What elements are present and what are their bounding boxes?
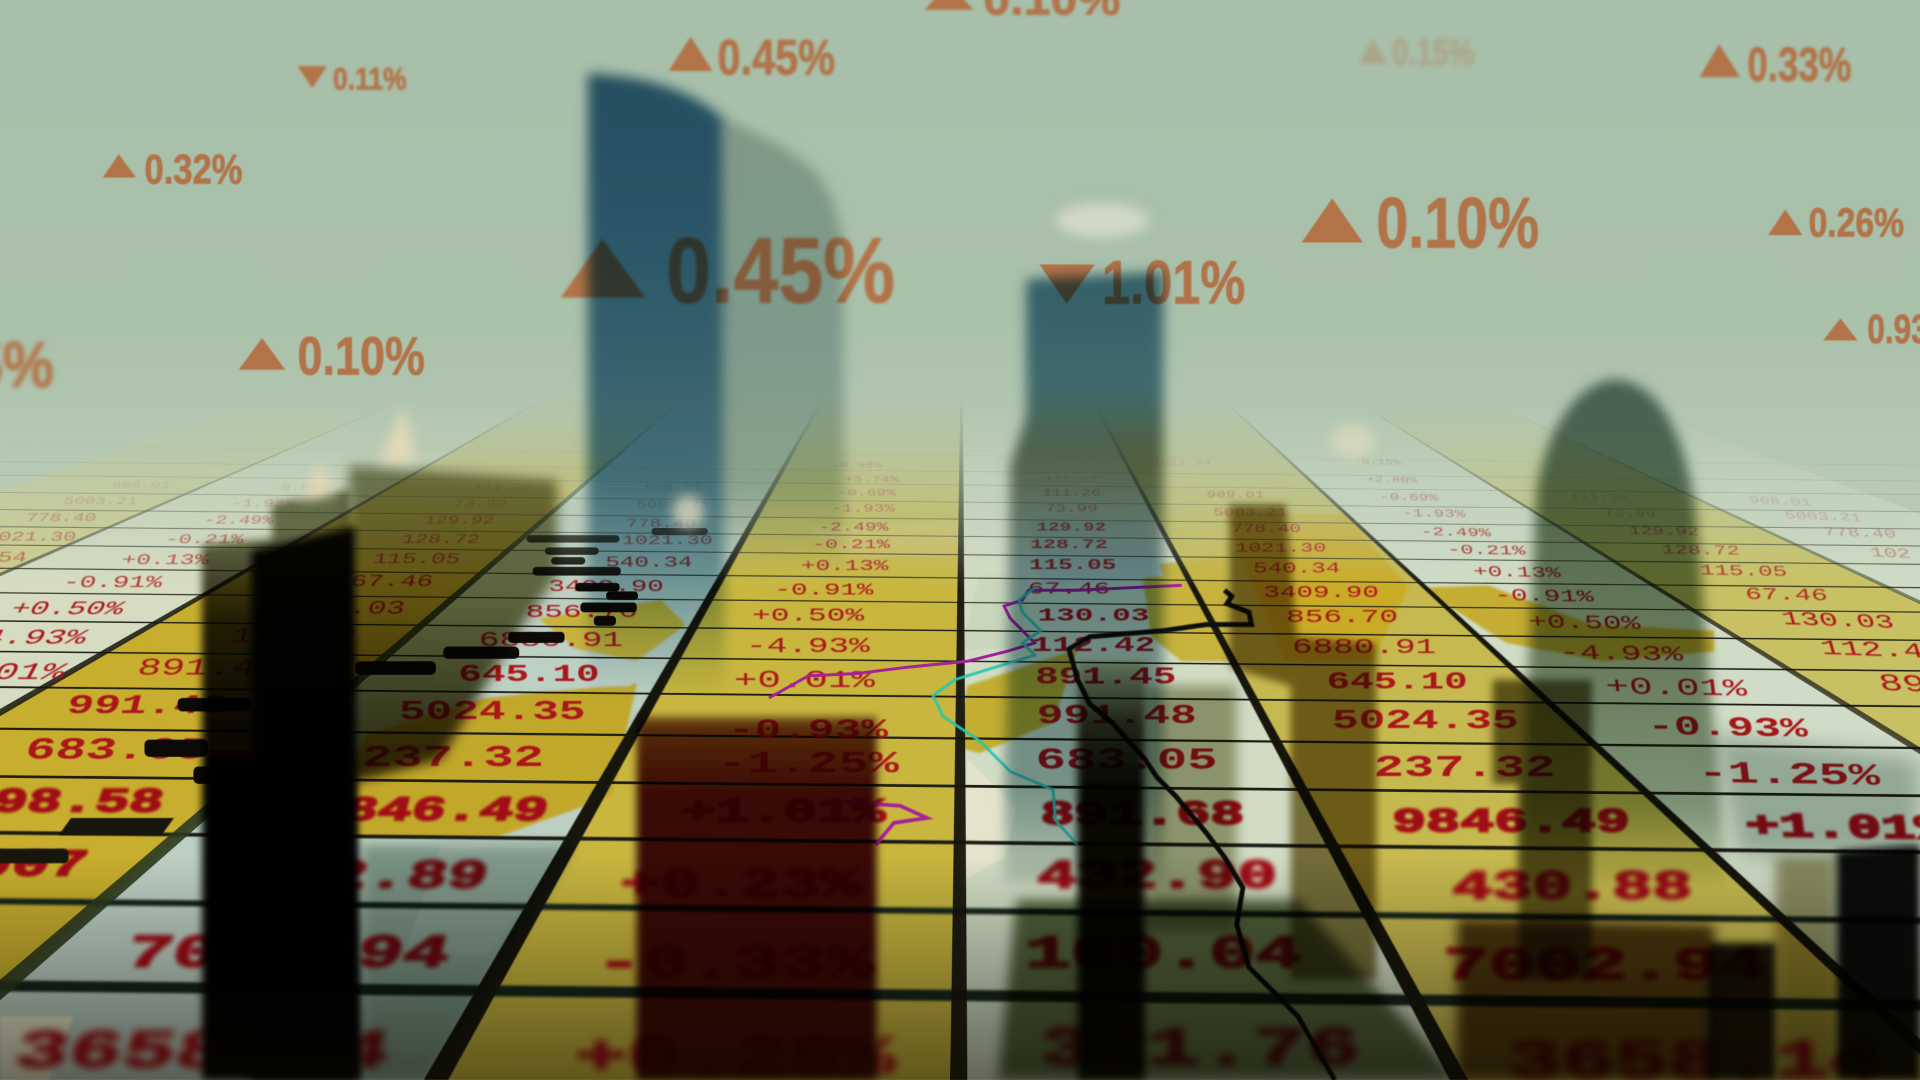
table values: far rows: 111.26 <box>1042 488 1101 499</box>
building: small olive column right <box>1776 857 1837 1080</box>
table values: far rows: -1.93% <box>230 499 297 510</box>
table values: middle rows: 991.48 <box>1037 701 1197 732</box>
table values: middle rows: 3409.90 <box>1264 583 1379 602</box>
table column lines <box>0 411 1920 1080</box>
table values: near blurred rows: 891.68 <box>1041 796 1244 835</box>
building: right far haze <box>1714 735 1920 857</box>
highlight: left block spire <box>380 404 416 463</box>
building: center near dark column <box>1078 661 1145 1080</box>
table values: far rows: +2.80% <box>1366 474 1419 486</box>
table values: nearest rows: 432.90 <box>1037 854 1277 900</box>
building: right mid band <box>1493 680 1592 980</box>
table columns <box>0 367 1920 1080</box>
building: left back tower <box>202 490 361 1080</box>
table values: middle rows: -2.49% <box>819 521 889 534</box>
table values: near blurred rows <box>0 784 1920 887</box>
table values: nearest rows: +0.23% <box>621 862 862 908</box>
bottom vignette <box>0 857 1920 1080</box>
table values: middle rows: +0.50% <box>5 599 130 620</box>
table values: middle rows: 856.70 <box>1286 607 1398 628</box>
table values: middle rows: -0.21% <box>812 538 890 552</box>
table values: middle rows: 6880.91 <box>479 628 623 653</box>
building: tall curved tower dark face <box>588 73 725 698</box>
table values: far rows: 909.01 <box>1206 490 1265 501</box>
ticker: 0.33%: 0.33% <box>1747 39 1851 92</box>
building: left black column <box>251 527 358 1080</box>
ticker: 0.45% large: 0.45% <box>666 218 895 322</box>
table values: middle rows: 891.45 <box>134 655 282 682</box>
ticker: 0.26% <box>1768 199 1904 245</box>
table values: middle rows: 891.45 <box>1035 664 1176 691</box>
table values: middle rows: 1021.30 <box>1235 541 1326 556</box>
table values: middle rows: +0.01% <box>1604 673 1749 703</box>
ticker: faint 0.15% <box>1359 32 1474 73</box>
table values: far rows: +5.74% <box>844 475 900 485</box>
table values: far rows: 908.01 <box>644 483 703 494</box>
table values: far rows: 908.01 <box>1748 495 1813 509</box>
table values: middle rows: 778.40 <box>626 517 696 531</box>
table values: middle rows: 645.10 <box>458 661 600 688</box>
table values: middle rows: 778.40 <box>1231 522 1301 536</box>
ticker: clipped top <box>924 0 1120 25</box>
table values: middle rows: +0.50% <box>1527 612 1642 635</box>
ticker: clipped right <box>1823 306 1920 352</box>
table values: middle rows: 129.92 <box>1628 524 1700 539</box>
building: near dark red tower <box>637 716 877 1080</box>
table values: middle rows: 112.42 <box>229 625 359 649</box>
table values: middle rows: -1.25% <box>717 746 900 782</box>
map continents <box>0 514 1714 1080</box>
table values: middle rows: -2.49% <box>202 514 276 527</box>
building: tall curved tower light face <box>722 118 845 576</box>
table values: middle rows: -0.93% <box>1646 712 1810 745</box>
candlestick bars near and blurred <box>0 818 174 863</box>
table values: middle rows: 67.46 <box>348 572 435 591</box>
table values: middle rows: -4.93% <box>1558 641 1685 667</box>
table values: middle rows: 129.92 <box>423 514 496 527</box>
table values: nearest rows: 7002.94 <box>120 929 456 981</box>
table values: middle rows: 5024.35 <box>1332 706 1519 737</box>
ticker: 0.10% large right: 0.10% <box>1376 184 1539 263</box>
table values: middle rows: 683.05 <box>21 733 212 768</box>
ticker: 1.01% down <box>1040 249 1245 317</box>
table values: far rows: 73.99 <box>1603 508 1657 521</box>
table values: middle rows: +0.13% <box>119 552 212 569</box>
table values: middle rows: 67.46 <box>1028 579 1110 599</box>
table values: far rows: 5003.21 <box>637 500 711 512</box>
table values: middle rows: +0.13% <box>1472 564 1563 582</box>
table values: middle rows: -4.93% <box>746 634 871 659</box>
table values: nearest rows: 430.88 <box>1452 865 1692 911</box>
table values: middle rows: 645.10 <box>1327 668 1468 696</box>
ticker: 0.32% up: 0.32% <box>144 146 242 193</box>
building: center grey band <box>1145 686 1237 931</box>
table values: far rows: -0.69% <box>838 488 897 499</box>
ticker: 0.33% <box>1700 39 1851 92</box>
table values: near blurred rows: 9846.49 <box>1392 803 1630 842</box>
table values: nearest rows: 100.04 <box>1025 929 1301 981</box>
table values: middle rows: -1.25% <box>1696 756 1883 794</box>
table values: middle rows: 237.32 <box>1374 750 1555 785</box>
highlight: center tower cap <box>1056 203 1149 238</box>
table values: far rows: 73.99 <box>1045 504 1098 515</box>
table values: middle rows: 778.40 <box>25 511 98 525</box>
table values: middle rows: 115.05 <box>1029 557 1116 574</box>
table values: middle rows: 991.48 <box>63 691 231 722</box>
table values: middle rows: 128.72 <box>1030 538 1108 552</box>
table values: middle rows: 540.34 <box>605 555 693 572</box>
table values: middle rows: +0.01% <box>734 667 876 694</box>
table values: nearest rows: 432.89 <box>242 854 493 900</box>
table values: far rows: 5003.21 <box>1783 509 1863 525</box>
table rows <box>0 446 1920 1005</box>
percentage tickers <box>0 0 1920 401</box>
highlight: left low spire <box>300 463 337 502</box>
line chart: black series <box>1069 590 1335 1080</box>
perspective data table floor: 321.76 <box>1040 1020 1360 1080</box>
table values: middle rows: 6880.91 <box>1292 636 1436 660</box>
ticker: 0.45% top <box>669 30 835 86</box>
building: left lower haze <box>361 845 576 1080</box>
table values: middle rows: 540.34 <box>1253 561 1340 578</box>
table values: middle rows: 778.40 <box>1822 526 1898 542</box>
table values: middle rows: +0.50% <box>752 605 865 627</box>
table values: far rows: 73.99 <box>452 499 508 510</box>
building: lower right black column <box>1707 943 1776 1080</box>
highlight: right spire <box>1331 424 1375 458</box>
table values: middle rows: 115.05 <box>1699 563 1788 581</box>
line chart: cyan series <box>933 588 1078 845</box>
perspective data table floor <box>0 411 1920 1080</box>
building: far right black corner <box>1837 845 1920 1080</box>
table values: middle rows: -2.49% <box>1420 525 1492 540</box>
table values: nearest rows: 7002.94 <box>1443 941 1765 994</box>
ticker: 0.10% left <box>239 327 425 387</box>
candlestick bars <box>144 528 708 784</box>
line chart: magenta near series <box>845 802 927 845</box>
ticker: 0.10% large right <box>1302 184 1539 263</box>
table values: far rows: -0.69% <box>269 483 331 494</box>
table values: middle rows: 130.03 <box>290 598 408 619</box>
line chart: magenta series <box>769 585 1182 698</box>
table values: far rows: 5003.21 <box>62 496 139 508</box>
highlight: mid spire <box>672 495 704 529</box>
table values: near blurred rows: +1.01% <box>682 794 886 832</box>
table values: middle rows: -0.93% <box>728 716 889 746</box>
table values: middle rows: 683.05 <box>1036 743 1217 778</box>
ticker: 0.11% down: 0.11% <box>333 60 407 96</box>
building: left block <box>349 465 557 784</box>
table values: middle rows: -0.21% <box>164 533 245 547</box>
table values: middle rows: 130.03 <box>1779 608 1897 634</box>
table values: middle rows: 128.72 <box>1661 543 1741 559</box>
building: center tower <box>1004 272 1163 882</box>
table values: middle rows: 128.72 <box>400 533 482 547</box>
table values: middle rows: 129.92 <box>1037 521 1106 534</box>
table values: nearest rows: -0.33% <box>596 939 874 991</box>
building: lower right row <box>1457 918 1714 1080</box>
ticker: 0.26%: 0.26% <box>1809 199 1904 245</box>
building: right rounded tower <box>1518 380 1727 882</box>
table values: middle rows: 237.32 <box>362 740 544 776</box>
table values: middle rows: 67.46 <box>1744 585 1829 605</box>
table values: far rows: 908.01 <box>110 481 171 492</box>
ticker: 1.01% down: 1.01% <box>1102 249 1245 317</box>
table values: far rows: 111.26 <box>1569 492 1629 504</box>
table values: middle rows: 130.03 <box>1037 605 1149 627</box>
table values: far rows: -0.69% <box>1379 492 1440 504</box>
table values: middle rows: 112.42 <box>1032 633 1155 657</box>
table values: middle rows: -0.91% <box>61 573 165 592</box>
table values: near blurred rows: 9846.49 <box>305 793 552 831</box>
table values: middle rows: -0.21% <box>1447 543 1527 559</box>
ticker: 0.32% up <box>103 146 242 193</box>
table values: middle rows: 102 <box>1868 545 1913 562</box>
table values: middle rows: -0.91% <box>1493 586 1595 607</box>
table values: middle rows: -0.91% <box>775 581 874 600</box>
table values: middle rows: +0.13% <box>801 559 889 575</box>
ticker: faint 0.15%: 0.15% <box>1392 32 1474 73</box>
ticker: 0.45% top: 0.45% <box>718 30 835 86</box>
table values: far rows: 111.26 <box>472 483 532 494</box>
table values: middle rows <box>0 511 1920 794</box>
table values: middle rows: 3409.90 <box>548 577 664 596</box>
sunlit building tops <box>300 203 1375 529</box>
table values: far rows: -1.93% <box>1401 508 1466 521</box>
table values: far rows: 1021.34 <box>1152 458 1211 468</box>
table values: nearest rows <box>130 856 1760 982</box>
building: center lower band <box>998 900 1457 1080</box>
table values: far rows: 5003.21 <box>1213 507 1287 519</box>
building: center-right olive band <box>1229 504 1376 980</box>
table values: middle rows: 115.05 <box>371 551 462 568</box>
table values: far rows: -0.15% <box>1353 458 1402 468</box>
ticker: 0.45% large <box>561 218 895 322</box>
table values: far rows <box>62 458 1863 525</box>
ticker: 0.11% down <box>298 60 407 96</box>
ticker: 0.10% left: 0.10% <box>298 327 425 387</box>
table values: far rows: -0.98% <box>831 460 884 470</box>
table values: middle rows: 5024.35 <box>399 697 586 728</box>
table values: middle rows: 1021.30 <box>622 534 713 549</box>
table values: far rows: 115.67 <box>1044 475 1099 485</box>
table values: middle rows: 856.70 <box>526 602 638 623</box>
table values: far rows: -1.93% <box>832 504 895 515</box>
